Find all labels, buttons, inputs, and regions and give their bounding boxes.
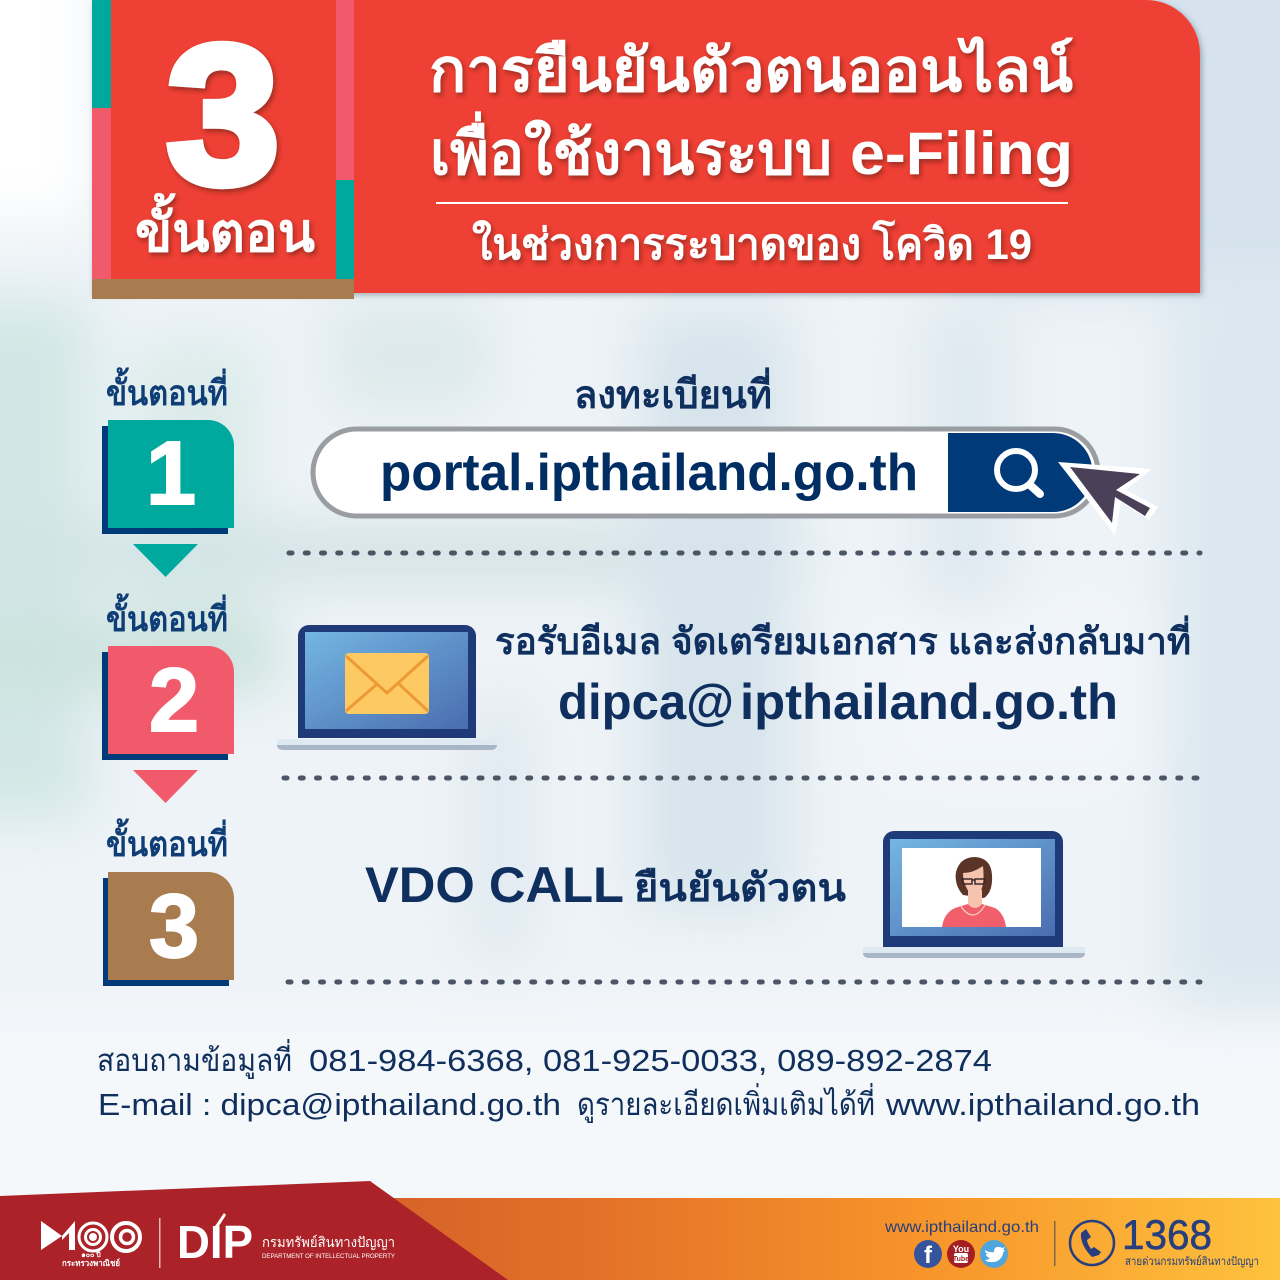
step 1 heading: ลงทะเบียนที่ [574, 367, 772, 417]
step 3 label: ขั้นตอนที่ [106, 818, 228, 864]
icon: magnifier [997, 451, 1040, 494]
contact line 1: 081-984-6368, 081-925-0033, 089-892-2874 [309, 1043, 992, 1078]
title line 2: เพื่อใช้งานระบบ [430, 111, 832, 187]
logo: DIP [177, 1213, 396, 1268]
step 1 badge [102, 420, 234, 534]
step 2 laptop icon [277, 625, 497, 750]
label: steps: ขั้นตอน [135, 193, 315, 263]
step 3 laptop icon [863, 831, 1085, 958]
step 2 text: รอรับอีเมล จัดเตรียมเอกสาร และส่งกลับมาที่ [495, 615, 1191, 662]
title line 2 [430, 111, 1073, 187]
contact line 2: ดูรายละเอียดเพิ่มเติมได้ที่ [577, 1083, 875, 1123]
arrow 1 to 2 [133, 544, 198, 577]
big number 3: 3 [166, 4, 280, 225]
logo: MOC 100 years: ๑๐๐ ปี [81, 1251, 101, 1259]
hotline number: 1368 [1122, 1211, 1212, 1258]
step 3 badge: 3 [149, 877, 199, 977]
website: www.ipthailand.go.th [884, 1219, 1039, 1236]
icon: facebook: f [924, 1242, 933, 1269]
contact line 1 [97, 1039, 992, 1079]
logo: DIP: DIP [177, 1216, 253, 1268]
step 1 label: ขั้นตอนที่ [106, 367, 228, 413]
footer band [0, 1181, 1280, 1280]
logo: MOC 100 years: กระทรวงพาณิชย์ [62, 1258, 120, 1268]
icon: twitter [980, 1240, 1008, 1268]
left colour strips [92, 0, 354, 299]
logo: MOC 100 years [41, 1221, 140, 1268]
url text: portal.ipthailand.go.th [380, 444, 918, 502]
subtitle: ในช่วงการระบาดของ โควิด 19 [472, 218, 1032, 269]
icon: facebook [914, 1240, 942, 1269]
contact line 1: สอบถามข้อมูลที่ [97, 1039, 292, 1079]
step 1 badge: 1 [146, 424, 196, 524]
step 2 email: ipthailand.go.th [740, 674, 1118, 730]
icon: envelope [345, 653, 429, 714]
icon: youtube: You [953, 1244, 969, 1254]
logo: DIP: กรมทรัพย์สินทางปัญญา [262, 1234, 395, 1250]
step 3 badge [103, 872, 234, 986]
confirm identity: ยืนยันตัวตน [634, 867, 846, 910]
step 2 badge: 2 [149, 651, 199, 751]
arrow 2 to 3 [133, 770, 198, 803]
step 2 label: ขั้นตอนที่ [106, 593, 228, 639]
contact line 2: E-mail : dipca@ipthailand.go.th [98, 1087, 561, 1122]
dotted dividers [284, 553, 1200, 982]
hotline caption: สายด่วนกรมทรัพย์สินทางปัญญา [1125, 1254, 1259, 1268]
step 2 email: dipca@ [558, 674, 734, 730]
step 2 email [558, 674, 1118, 730]
step 3 text [365, 857, 846, 913]
icon: youtube [947, 1240, 975, 1268]
vdo call: VDO CALL [365, 857, 624, 913]
search bar [313, 429, 1158, 535]
step 2 badge [102, 646, 234, 760]
header banner [92, 0, 1200, 299]
title line 1: การยืนยันตัวตนออนไลน์ [429, 35, 1074, 104]
icon: phone [1070, 1221, 1114, 1265]
icon: youtube: Tube [953, 1256, 969, 1263]
contact line 2 [98, 1083, 1200, 1123]
logo: DIP: DEPARTMENT OF INTELLECTUAL PROPERTY [262, 1253, 396, 1260]
title line 2: e-Filing [850, 120, 1073, 187]
icon: cursor [1058, 462, 1158, 535]
icon: woman [942, 857, 1006, 927]
contact line 2: www.ipthailand.go.th [885, 1087, 1200, 1122]
